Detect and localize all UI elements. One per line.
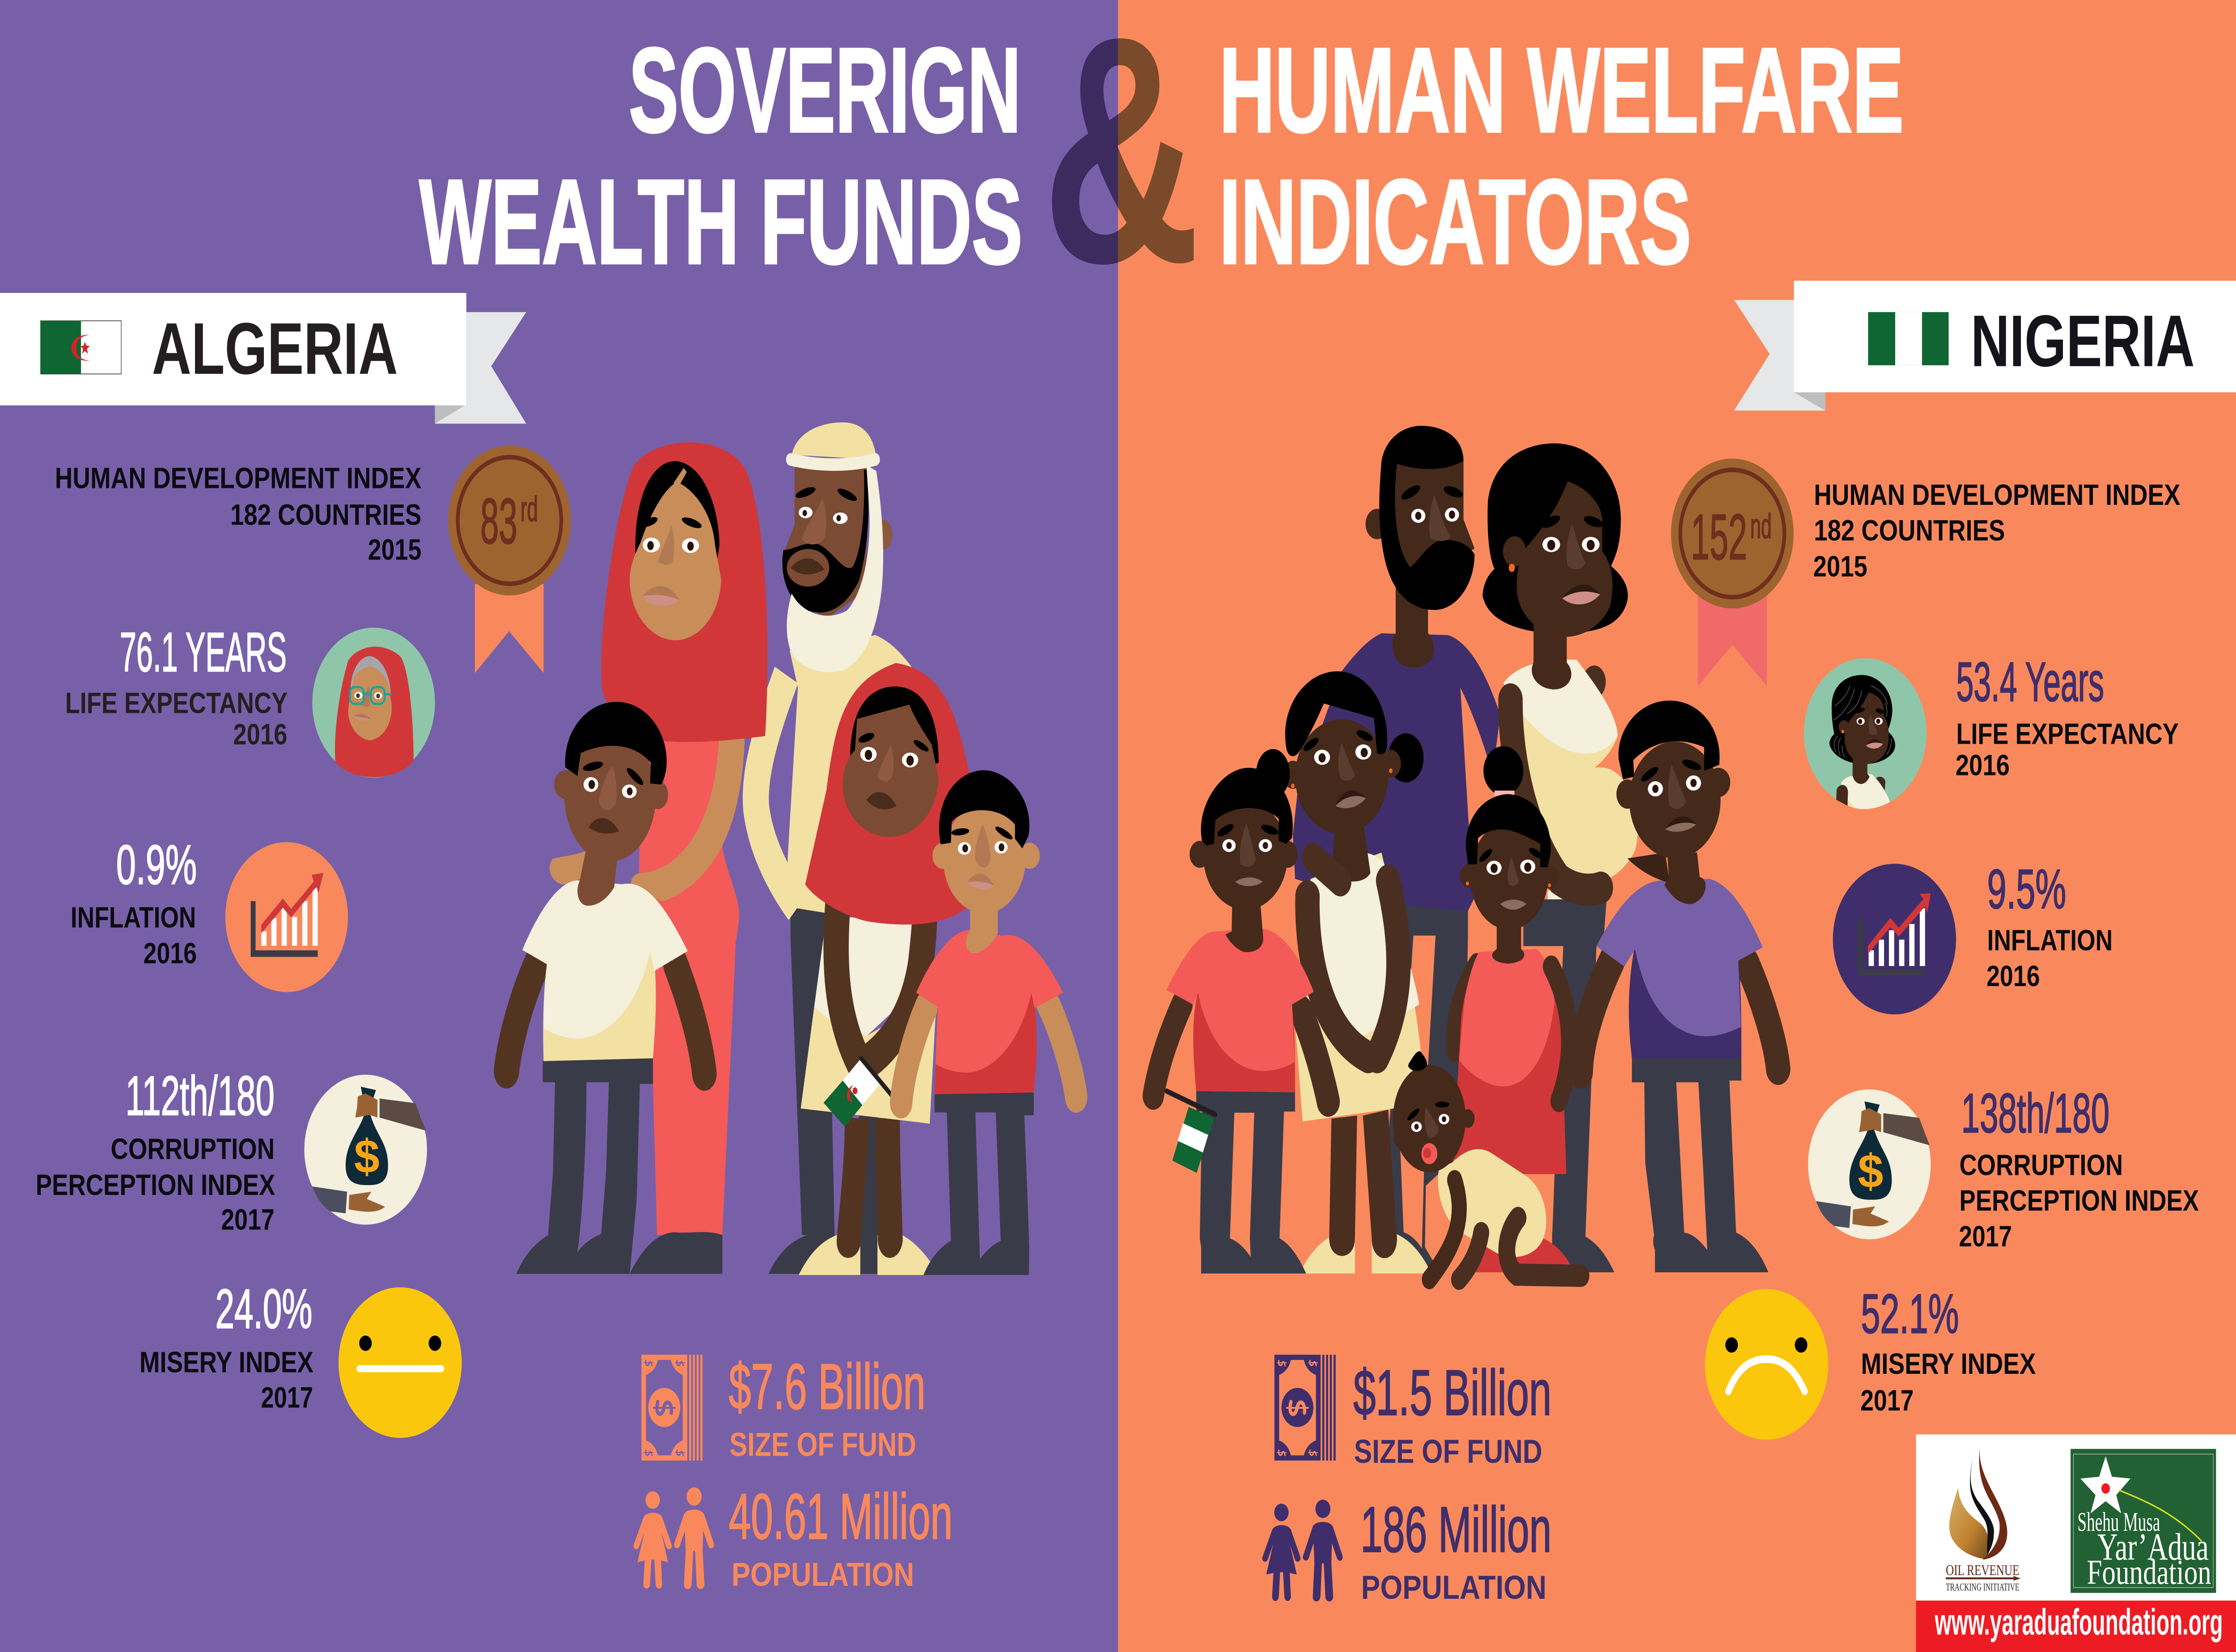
text: misery Algeria: 24.0%: [216, 1278, 312, 1340]
background: right orange half: [1118, 0, 2236, 1652]
figure: mother: [1482, 443, 1638, 1272]
text: corruption Algeria: PERCEPTION INDEX: [36, 1169, 275, 1201]
illustration: Algerian family: [506, 422, 1076, 1275]
text: misery Algeria: 2017: [261, 1381, 313, 1414]
text: misery Nigeria: [1860, 1283, 2036, 1417]
figure: right boy: [901, 770, 1076, 1275]
figure: small girl in coral dress: [1453, 746, 1574, 1272]
text: inflation Algeria: 0.9%: [116, 834, 197, 896]
text: inflation Nigeria: 9.5%: [1987, 859, 2066, 921]
medal: HDI 152nd: [1671, 458, 1794, 686]
banner: Algeria: [0, 293, 526, 424]
text: HDI Algeria: 2015: [368, 533, 421, 566]
logo: Shehu Musa Yar'Adua Foundation: Yar’Adua: [2097, 1525, 2209, 1568]
figure: purple-shirt boy: [1580, 701, 1778, 1272]
logo: Oil Revenue Tracking Initiative: TRACKING INITIATIVE: [1946, 1581, 2019, 1593]
text: misery Nigeria: 52.1%: [1861, 1283, 1959, 1345]
text: corruption Nigeria: CORRUPTION: [1959, 1148, 2123, 1182]
figure: father: [1293, 426, 1500, 1268]
icon: woman and man orange: [634, 1487, 714, 1589]
figure: father: [756, 422, 914, 1274]
text: size of fund Algeria: SIZE OF FUND: [729, 1427, 916, 1463]
text: HDI Algeria: [55, 462, 421, 566]
medal: HDI 152nd: nd: [1750, 507, 1772, 546]
logo: Shehu Musa Yar'Adua Foundation: Foundation: [2087, 1554, 2211, 1592]
banner: Nigeria: NIGERIA: [1971, 300, 2195, 382]
text: inflation Nigeria: 2016: [1986, 960, 2040, 992]
text: HDI Nigeria: HUMAN DEVELOPMENT INDEX: [1814, 479, 2181, 511]
illustration: Nigerian family: [1153, 426, 1778, 1279]
text: corruption Nigeria: 138th/180: [1961, 1082, 2109, 1144]
text: corruption Algeria: CORRUPTION: [110, 1132, 275, 1165]
flag: Nigeria: [1868, 312, 1948, 365]
text: corruption Nigeria: 2017: [1959, 1220, 2012, 1253]
icon: banknote orange: [641, 1355, 703, 1461]
text: inflation Nigeria: [1986, 859, 2113, 992]
text: size of fund Algeria: [728, 1351, 926, 1463]
title: SOVERIGN: [629, 23, 1021, 157]
text: corruption Algeria: 112th/180: [126, 1065, 275, 1127]
text: size of fund Nigeria: $1.5 Billion: [1353, 1357, 1551, 1428]
text: life expectancy Algeria: 76.1 YEARS: [120, 621, 287, 683]
icon: sad face: [1705, 1289, 1828, 1440]
figure: left boy: [506, 702, 704, 1274]
text: life expectancy Nigeria: [1956, 651, 2179, 782]
text: life expectancy Nigeria: 53.4 Years: [1956, 651, 2104, 713]
icon: old woman in red headscarf: [312, 628, 435, 778]
title: [419, 23, 1904, 289]
banner: Algeria: ALGERIA: [152, 308, 398, 390]
text: population Algeria: POPULATION: [732, 1556, 914, 1593]
logo: Oil Revenue Tracking Initiative: [1946, 1449, 2020, 1593]
text: life expectancy Algeria: LIFE EXPECTANCY: [65, 686, 288, 720]
text: HDI Algeria: 182 COUNTRIES: [230, 498, 421, 531]
icon: small Nigerian flag: [1167, 1091, 1215, 1173]
background: left purple half: [0, 0, 1118, 1652]
logo: Shehu Musa Yar'Adua Foundation: [2071, 1449, 2216, 1593]
icon: rising chart purple: [1833, 864, 1956, 1014]
panel: Algeria fund and population: [634, 1351, 953, 1593]
text: HDI Nigeria: 182 COUNTRIES: [1814, 514, 2005, 547]
text: population Nigeria: 186 Million: [1360, 1494, 1551, 1565]
text: population Nigeria: [1360, 1494, 1551, 1606]
medal: HDI 83rd: [448, 445, 571, 673]
icon: money bag exchange Nigeria: [1808, 1089, 1931, 1239]
text: inflation Algeria: 2016: [143, 937, 197, 970]
figure: tall girl: [1283, 671, 1431, 1274]
text: corruption Algeria: [36, 1065, 275, 1236]
icon: woman and man purple: [1262, 1500, 1342, 1601]
text: population Algeria: [728, 1480, 953, 1593]
text: corruption Nigeria: [1959, 1082, 2199, 1253]
title: INDICATORS: [1219, 155, 1691, 289]
panel: logos: [1916, 1434, 2236, 1652]
panel: Nigeria fund and population: [1262, 1355, 1551, 1606]
text: HDI Nigeria: [1813, 479, 2181, 583]
text: inflation Algeria: INFLATION: [71, 901, 196, 934]
figure: girl with Nigerian flag: [1153, 749, 1328, 1274]
logo: Shehu Musa Yar'Adua Foundation: Shehu Musa: [2077, 1507, 2160, 1537]
medal: HDI 83rd: rd: [521, 490, 538, 529]
icon: money bag exchange Algeria: [304, 1075, 427, 1224]
text: HDI Nigeria: 2015: [1813, 550, 1868, 583]
text: size of fund Nigeria: SIZE OF FUND: [1354, 1433, 1542, 1470]
text: life expectancy Algeria: [65, 621, 288, 751]
text: misery Algeria: [140, 1278, 313, 1414]
text: corruption Nigeria: PERCEPTION INDEX: [1959, 1184, 2199, 1217]
text: misery Nigeria: 2017: [1860, 1384, 1914, 1417]
text: corruption Algeria: 2017: [221, 1203, 275, 1236]
text: life expectancy Nigeria: 2016: [1956, 749, 2010, 782]
medal: HDI 152nd: 152: [1691, 501, 1747, 573]
text: size of fund Nigeria: [1353, 1357, 1551, 1470]
text: misery Nigeria: MISERY INDEX: [1861, 1347, 2036, 1380]
title: WEALTH FUNDS: [419, 155, 1022, 289]
text: size of fund Algeria: $7.6 Billion: [728, 1351, 926, 1423]
icon: rising chart orange: [225, 842, 348, 992]
text: inflation Algeria: [71, 834, 197, 970]
icon: older Nigerian woman: [1804, 658, 1927, 809]
text: population Algeria: 40.61 Million: [728, 1480, 953, 1552]
text: life expectancy Algeria: 2016: [233, 718, 288, 751]
text: HDI Algeria: HUMAN DEVELOPMENT INDEX: [55, 462, 421, 495]
figure: crawling baby: [1393, 1051, 1581, 1279]
flag: Algeria: [41, 321, 121, 374]
text: population Nigeria: POPULATION: [1361, 1569, 1546, 1606]
text: misery Algeria: MISERY INDEX: [140, 1346, 313, 1378]
figure: mother: [550, 442, 767, 1274]
text: life expectancy Nigeria: LIFE EXPECTANCY: [1956, 717, 2179, 750]
text: inflation Nigeria: INFLATION: [1987, 924, 2113, 957]
logo: Oil Revenue Tracking Initiative: OIL REVENUE: [1946, 1562, 2019, 1579]
title: HUMAN WELFARE: [1219, 23, 1904, 157]
icon: neutral face: [339, 1287, 462, 1438]
panel: Nigeria stats: [1671, 458, 2199, 1440]
medal: HDI 83rd: 83: [480, 485, 517, 557]
panel: Algeria stats: [36, 445, 571, 1438]
banner: Nigeria: [1734, 281, 2236, 411]
figure: girl in red headscarf: [799, 663, 970, 1275]
icon: banknote purple: [1275, 1355, 1336, 1461]
